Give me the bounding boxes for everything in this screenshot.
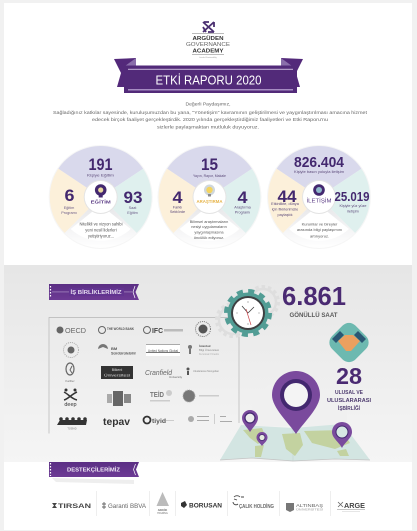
panel: partner logos: Bilkent	[112, 368, 122, 372]
panel: araştırma wheel: Programı	[235, 210, 250, 214]
heading ribbon: iş birliklerimiz: İŞ BİRLİKLERİMİZ	[70, 289, 122, 296]
stat: ulusal ve uluslararası işbirliği: ULUSAL VE	[335, 390, 363, 396]
panel: araştırma wheel: nesiyi uygulamaların	[191, 224, 227, 229]
heading ribbon: iş birliklerimiz	[49, 284, 139, 300]
logo: Argüden Governance Academy: GOVERNANCE	[186, 42, 230, 48]
panel: araştırma wheel: 4	[238, 188, 248, 207]
stat: ulusal ve uluslararası işbirliği: ULUSLARARASI	[327, 398, 371, 404]
icon: iletişim ring	[313, 184, 325, 196]
panel: partner logos: Üniversitesi	[104, 374, 130, 378]
logo: Argüden Governance Academy	[186, 22, 230, 59]
panel: eğitim wheel: yeni nesil liderleri	[85, 228, 117, 232]
panel: partner logos: İstanbul	[199, 343, 211, 348]
logo: Argüden Governance Academy: ACADEMY	[192, 48, 224, 54]
panel: iletişim wheel: Kişiyle yüz yüze	[339, 204, 367, 208]
panel: supporters logos	[52, 491, 365, 516]
panel: araştırma wheel: Bilimsel araştırmaların	[190, 219, 228, 224]
panel: partner logos: OECD	[65, 328, 86, 335]
panel: eğitim wheel: EĞİTİM	[91, 198, 111, 204]
panel: iletişim wheel: İLETİŞİM	[306, 198, 332, 204]
panel: iletişim wheel: Kurumlar ve bireyler	[302, 222, 338, 226]
icon: handshake	[326, 319, 372, 366]
heading ribbon: destekçilerimiz	[49, 462, 139, 484]
stat: ulusal ve uluslararası işbirliği	[327, 363, 371, 412]
stat: ulusal ve uluslararası işbirliği: İŞBİRLİĞİ	[338, 404, 360, 412]
panel: iletişim wheel: Etkinlikte, dünya	[271, 202, 300, 206]
intro paragraph: edecek birçok faaliyet gerçekleştirdik. 2020 yılında gerçekleştirdiğimiz faaliyetleri ve Etki Raporu'nu	[92, 117, 329, 122]
panel: araştırma wheel: Araştırma	[234, 206, 252, 210]
logo: Argüden Governance Academy: ARGÜDEN	[192, 35, 224, 42]
panel: partner logos: United Nations Global	[148, 349, 178, 353]
panel: partner logos: BM	[111, 346, 118, 351]
intro paragraph: sizlerle paylaşmaktan mutluluk duyuyoruz.	[157, 124, 259, 130]
panel: iletişim wheel: 25.019	[334, 189, 370, 204]
panel: partner logos: KalDer	[65, 379, 75, 383]
panel: partner logos: Sürdürülebilir	[111, 350, 136, 356]
panel: eğitim wheel: Eğitim	[64, 206, 74, 210]
title text: ETKİ RAPORU 2020	[156, 72, 262, 88]
panel: iletişim wheel: 44	[278, 187, 297, 206]
panel: partner logos: University	[169, 375, 183, 379]
panel: araştırma wheel: Yayın, Rapor, Makale	[193, 173, 227, 178]
icon: clock and gears	[216, 286, 278, 336]
stat: gönüllü saat: 6.861	[282, 283, 346, 311]
icon: small pin bottom	[256, 432, 268, 446]
panel: grey collaboration band	[4, 265, 412, 462]
panel: iletişim wheel: için fikirlerimizle	[272, 208, 298, 212]
panel: supporters logos: AKKÖK	[158, 507, 167, 512]
panel: araştırma wheel: ARAŞTIRMA	[196, 199, 223, 204]
intro paragraph	[53, 102, 368, 130]
panel: iletişim wheel: 826.404	[294, 154, 345, 171]
panel: araştırma wheel: 4	[172, 188, 183, 207]
panel: partner logos: THE WORLD BANK	[107, 327, 134, 331]
panel: partner logos: Bilgi Üniversitesi	[199, 348, 219, 352]
panel: partner logos: tepav	[103, 417, 130, 428]
panel: supporters logos: ARGE	[344, 501, 365, 510]
panel: eğitim wheel: Programı	[61, 211, 77, 215]
panel: supporters logos: TIRSAN	[58, 503, 91, 510]
intro paragraph: Sağladığınız katkılar sayesinde, kuruluşumuzdan bu yana, "Yönetişim" kavramının geliştirilmesi ve yaygınlaştırılması amacına hizmet	[53, 110, 368, 115]
panel: supporters logos: HOLDİNG	[157, 512, 168, 515]
panel: partner logos: TÜSİAD	[67, 428, 77, 430]
panel: eğitim wheel: Saat	[129, 206, 137, 210]
panel: supporters logos: ÜNİVERSİTESİ	[296, 506, 323, 512]
panel: eğitim wheel: Nitelikli ve vizyon sahibi	[79, 222, 123, 226]
illustration: world map	[220, 424, 370, 461]
panel: eğitim wheel: 191	[88, 155, 112, 174]
panel: supporters logos: ÇALIK HOLDİNG	[239, 503, 274, 510]
illustration: clouds	[252, 384, 347, 426]
panel: partner logos: tiyid	[152, 419, 166, 425]
icon: araştırma bulb	[204, 184, 215, 196]
panel: araştırma wheel: yaygınlaşmasına	[194, 230, 224, 234]
panel: araştırma wheel: öncülük ediyoruz.	[194, 235, 224, 240]
stat: gönüllü saat: GÖNÜLLÜ SAAT	[290, 312, 338, 319]
panel: supporters logos: ALTINBAŞ	[296, 503, 323, 508]
intro paragraph: Değerli Paydaşımız,	[186, 102, 230, 106]
panel: eğitim wheel: Kişiye Eğitim	[87, 172, 115, 178]
panel: partner logos: Kurumsal Yönetim	[199, 352, 219, 356]
icon: small pin left	[242, 410, 258, 432]
panel: araştırma wheel: 15	[201, 155, 218, 174]
heading ribbon: destekçilerimiz: DESTEKÇİLERİMİZ	[67, 466, 121, 474]
icon: large location pin	[272, 371, 320, 434]
panel: partner logos	[49, 318, 239, 434]
icon: eğitim bulb	[95, 184, 106, 198]
panel: partner logos: Cranfield	[145, 370, 173, 377]
panel: eğitim wheel: yetiştiriyoruz...	[88, 234, 114, 238]
panel: iletişim wheel: paylaştık	[278, 213, 293, 217]
panel: supporters logos: Garanti BBVA	[108, 503, 147, 510]
panel: iletişim wheel: artırıyoruz.	[310, 234, 329, 238]
logo: Argüden Governance Academy: Istanbul Sustainability	[199, 56, 217, 59]
panel: partner logos: deep	[64, 402, 77, 408]
icon: small pin right	[332, 422, 352, 448]
panel: araştırma wheel	[158, 145, 262, 249]
panel: eğitim wheel: 93	[124, 188, 142, 207]
panel: iletişim wheel	[267, 145, 371, 249]
stat: ulusal ve uluslararası işbirliği: 28	[336, 363, 362, 389]
panel: eğitim wheel: Eğitim	[127, 211, 138, 215]
panel: iletişim wheel: iletişim	[347, 210, 359, 214]
panel: eğitim wheel: 6	[64, 186, 74, 205]
panel: iletişim wheel: Kişiyle basın yoluyla iletişim	[294, 170, 344, 174]
panel: partner logos: IFC	[152, 328, 163, 335]
panel: partner logos: TEİD	[150, 390, 164, 399]
panel: eğitim wheel	[49, 145, 153, 249]
panel: supporters logos: BORUSAN	[189, 502, 222, 510]
panel: partner logos: Uluslararası Mongolian	[193, 369, 219, 373]
panel: araştırma wheel: Sektörde	[170, 210, 185, 214]
title ribbon	[114, 58, 303, 93]
panel: iletişim wheel: arasında bilgi paylaşımını	[297, 227, 342, 232]
panel: araştırma wheel: Farklı	[173, 206, 182, 210]
